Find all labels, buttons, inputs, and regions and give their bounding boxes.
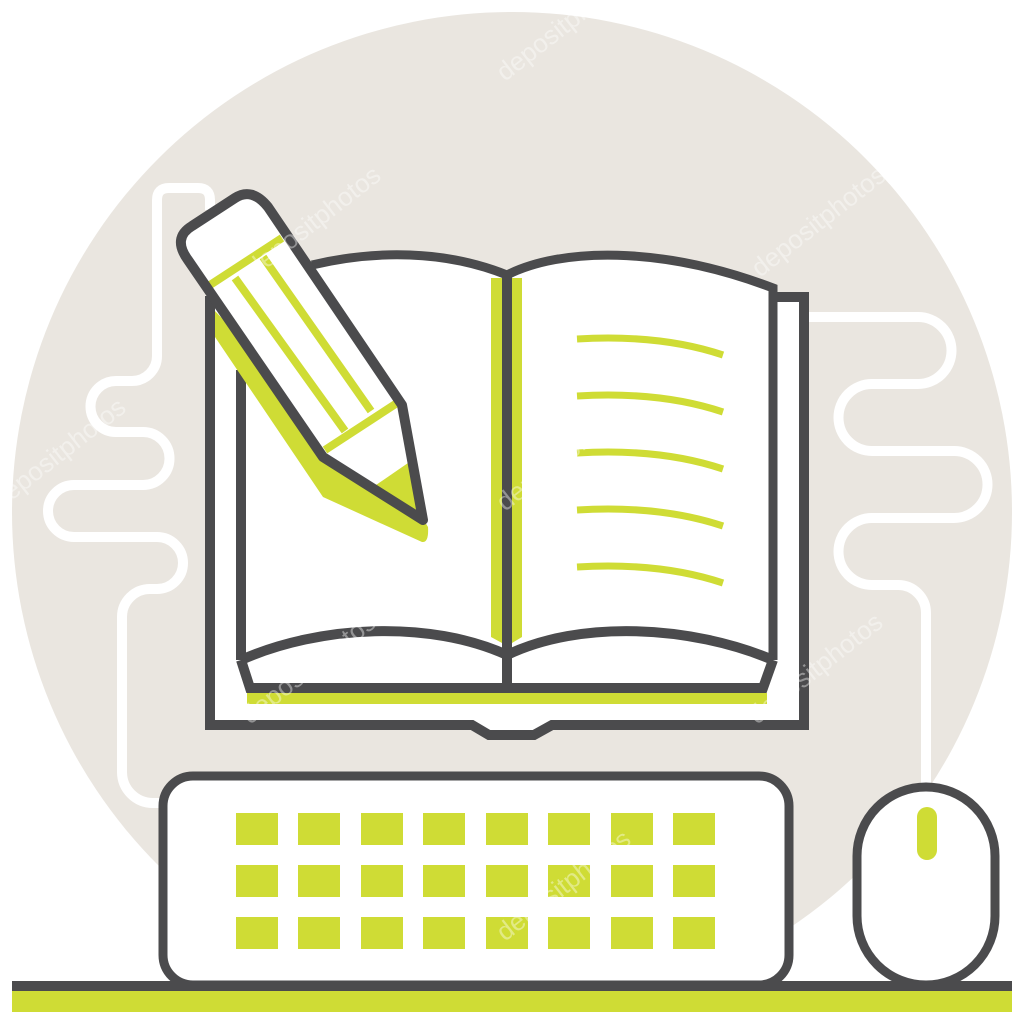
mouse scroll wheel: [917, 807, 937, 860]
book base: [241, 660, 773, 688]
mouse body: [857, 787, 995, 985]
pencil green details: [210, 238, 397, 450]
left white cable: [48, 188, 210, 803]
watermarks: depositphotos: [240, 159, 386, 283]
keyboard: [163, 776, 789, 985]
right white cable: [808, 317, 988, 790]
watermarks: depositphotos: [745, 159, 891, 283]
lower page curves: [241, 631, 773, 660]
green base bar: [247, 693, 767, 704]
pencil tip: [376, 463, 420, 515]
pencil: [181, 194, 428, 542]
keyboard body: [163, 776, 789, 985]
right page outline: [507, 255, 773, 660]
mouse: [857, 787, 995, 985]
desk green band: [12, 991, 1012, 1012]
left page outline: [312, 255, 507, 275]
watermarks: depositphotos: [490, 393, 636, 517]
pencil shadow: [215, 311, 428, 542]
desk dark edge: [12, 981, 1012, 991]
watermarks: depositphotos: [235, 606, 381, 730]
pencil outline: [181, 194, 423, 520]
green spine stripes: [491, 278, 522, 643]
pencil body: [181, 194, 423, 520]
book pages: [241, 255, 773, 688]
book cover: [210, 296, 804, 735]
watermarks: depositphotos: [742, 606, 888, 730]
book spine: [502, 275, 512, 688]
text lines on right page: [577, 338, 723, 583]
watermarks: depositphotos: [490, 823, 636, 947]
desk line: [12, 981, 1012, 1012]
open book: [210, 255, 804, 735]
keys: [236, 813, 715, 949]
